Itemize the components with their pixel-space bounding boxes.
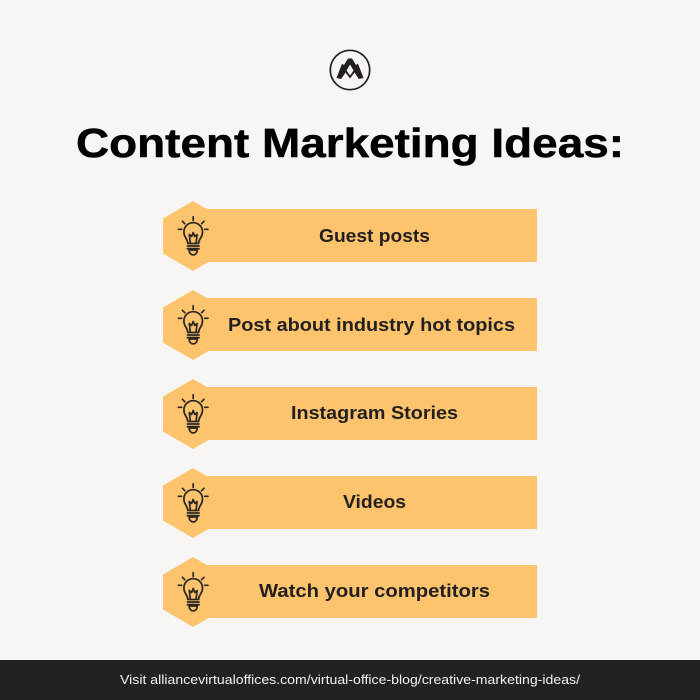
item 5: Watch your competitors — [163, 557, 537, 627]
icon: light bulb — [178, 484, 208, 522]
logo: circled peak mark — [330, 50, 370, 90]
icon: light bulb — [178, 573, 208, 611]
icon: light bulb — [178, 217, 208, 255]
icon: light bulb — [178, 395, 208, 433]
item 4: Videos: Videos — [343, 492, 406, 512]
item 2: Post about industry hot topics: Post about industry hot topics — [228, 315, 515, 335]
item 4: Videos — [163, 468, 537, 538]
item 5: Watch your competitors: Watch your competitors — [259, 581, 490, 601]
item 1: Guest posts: Guest posts — [319, 226, 430, 246]
footer bar — [0, 660, 700, 700]
item 3: Instagram Stories: Instagram Stories — [291, 403, 458, 423]
item 1: Guest posts — [163, 201, 537, 271]
item 2: Post about industry hot topics — [163, 290, 537, 360]
title: Content Marketing Ideas: — [76, 120, 624, 166]
footer link text: Visit alliancevirtualoffices.com/virtual-office-blog/creative-marketing-ideas/ — [120, 672, 580, 687]
icon: light bulb — [178, 306, 208, 344]
item 3: Instagram Stories — [163, 379, 537, 449]
